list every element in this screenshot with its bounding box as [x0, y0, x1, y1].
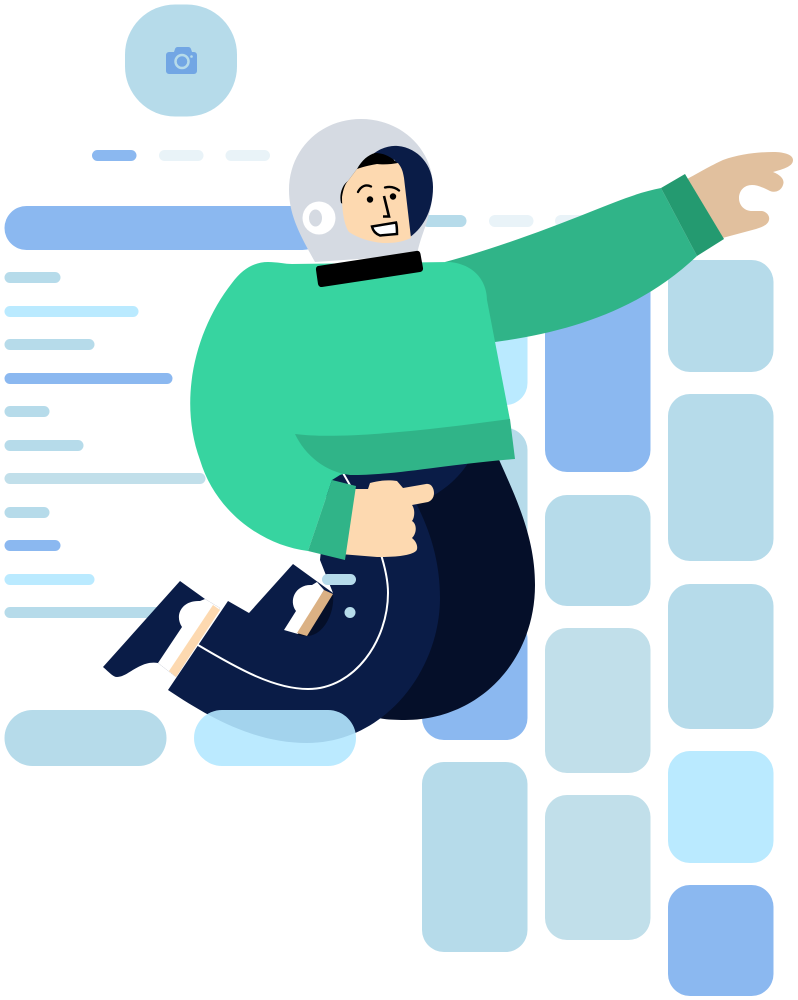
small dash on leg: [322, 574, 356, 585]
back leg: [370, 440, 535, 720]
eyebrows: [358, 185, 399, 192]
upper boot cutout: [284, 582, 333, 636]
sweater hem: [295, 419, 515, 475]
helmet collar: [316, 251, 423, 287]
button: right pill: [194, 710, 356, 766]
visor back: [372, 146, 433, 239]
icon: camera: [166, 47, 197, 74]
gallery tiles: column 1: [422, 294, 528, 952]
nose: [383, 196, 389, 216]
profile avatar with camera icon: [125, 4, 237, 116]
astronaut figure: [103, 119, 793, 743]
raised hand: [680, 152, 793, 240]
torso and bent arm: [190, 262, 510, 551]
pointing hand: [340, 480, 434, 557]
gallery tiles: column 2: [545, 261, 650, 940]
front leg: [168, 460, 470, 743]
text placeholder lines: [4, 272, 206, 618]
lower boot: [103, 581, 220, 677]
small dot on leg: [344, 607, 356, 618]
hair: [340, 153, 403, 205]
tab dashes: gallery row: [422, 215, 600, 227]
mouth: [372, 222, 397, 236]
face: [342, 163, 411, 243]
helmet valve: [302, 202, 336, 234]
pointing arm cuff: [308, 480, 356, 560]
eyes: [367, 193, 396, 203]
helmet: [289, 119, 433, 262]
heading bar: [4, 206, 324, 250]
button: left pill: [4, 710, 166, 766]
raised arm cuff: [661, 174, 724, 256]
tether line: [198, 473, 388, 689]
tab dashes: profile row: [92, 150, 270, 161]
raised arm sleeve: [445, 188, 697, 342]
gallery tiles: column 3: [668, 260, 774, 996]
